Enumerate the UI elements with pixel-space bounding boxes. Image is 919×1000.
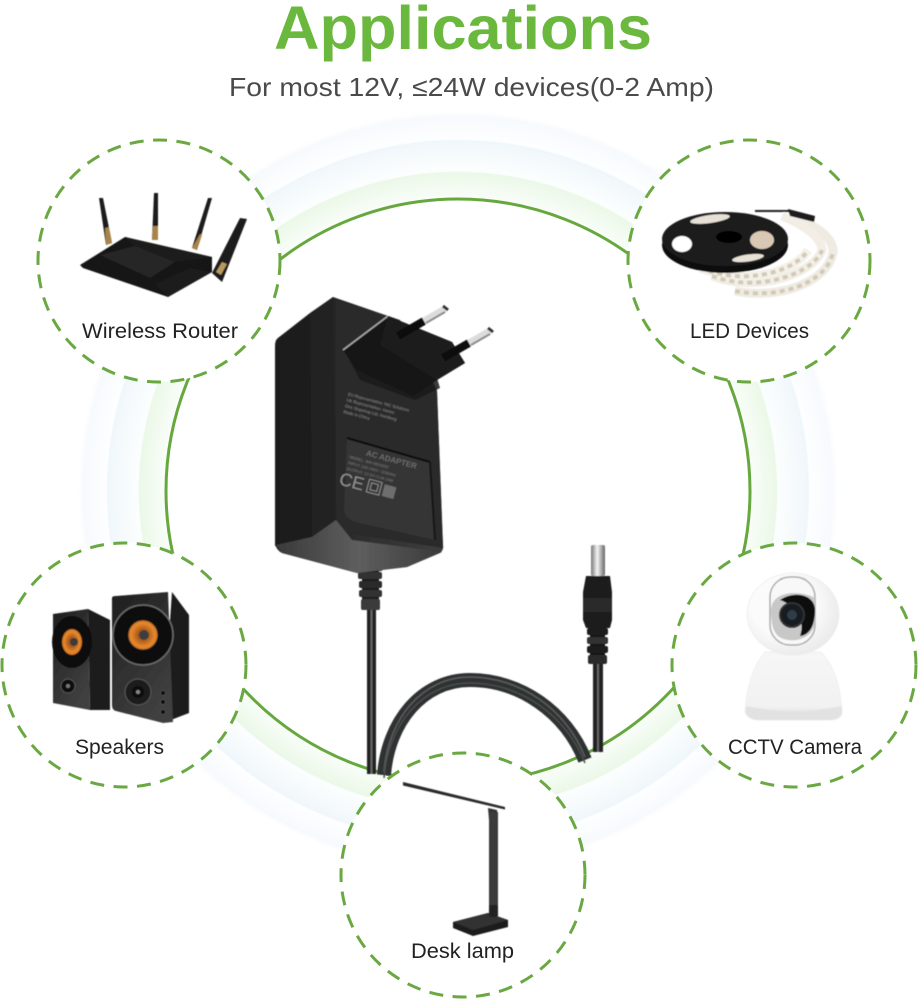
LED circle xyxy=(628,140,870,382)
icon: desk lamp xyxy=(403,782,508,936)
DC barrel plug xyxy=(583,545,612,664)
camera circle xyxy=(672,543,916,787)
panel: CCTV camera xyxy=(672,543,916,787)
label: LED Devices xyxy=(690,320,809,343)
panel: LED devices xyxy=(628,140,870,382)
icon: camera xyxy=(745,573,842,720)
panel: desk lamp xyxy=(341,753,585,997)
icon: speakers xyxy=(52,592,189,723)
label: CCTV Camera xyxy=(728,736,862,759)
speakers circle xyxy=(2,543,246,787)
adapter body: INPUT: 100-240V~ 50/60Hz xyxy=(348,460,397,478)
lamp circle xyxy=(341,753,585,997)
label: Wireless Router xyxy=(82,320,238,343)
plug head xyxy=(343,316,465,400)
plug pins xyxy=(398,306,493,358)
subtitle: For most 12V, ≤24W devices(0-2 Amp) xyxy=(229,72,714,102)
adapter body: CE xyxy=(337,469,367,495)
icon: LED strip reel xyxy=(662,209,833,293)
label: Speakers xyxy=(75,736,164,759)
central white disc with green ring xyxy=(166,199,750,783)
adapter body: OUTPUT: 12.0V=2.0A 24W xyxy=(346,466,394,483)
power adapter product image xyxy=(275,297,612,778)
label: Desk lamp xyxy=(411,940,514,963)
adapter body: MODEL: WH-6820000 xyxy=(349,454,390,470)
router circle xyxy=(38,140,280,382)
concentric glow rings xyxy=(78,111,838,871)
panel: wireless router xyxy=(38,140,280,382)
icon: router xyxy=(80,193,247,297)
adapter body: One Stopshop Ltd. Hamburg xyxy=(344,403,398,422)
adapter body: UK Representative: Hanze xyxy=(346,397,396,415)
adapter body xyxy=(275,297,443,573)
panel: speakers xyxy=(2,543,246,787)
adapter body: EU Representative: NIC Solutions xyxy=(348,392,410,413)
adapter body: Made in China xyxy=(343,409,371,421)
strain relief xyxy=(353,552,388,610)
output cable xyxy=(367,600,603,778)
adapter body: AC ADAPTER xyxy=(365,449,418,471)
